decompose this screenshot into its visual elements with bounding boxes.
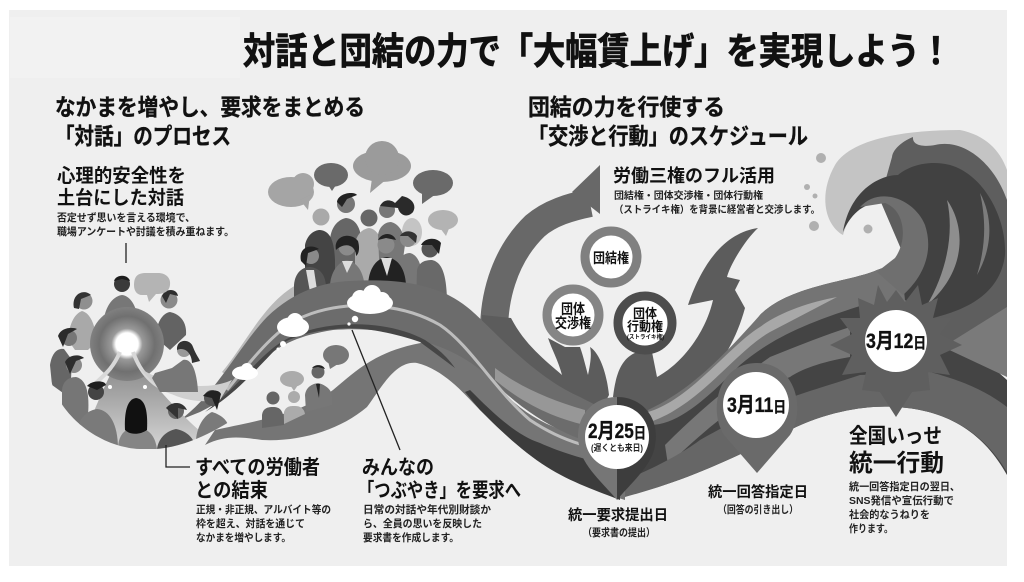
ribbon: arch towards the wave — [620, 260, 1007, 495]
workers on the arch with speech bubbles — [268, 141, 458, 305]
heading: dialogue process: 「対話」のプロセス — [55, 123, 231, 149]
text block: nationwide unified action: 統一回答指定日の翌日、 — [849, 480, 960, 493]
caption: unified demand date — [568, 506, 668, 539]
pin: 3月12日: 3月12日 — [866, 330, 926, 353]
ribbon: light backing band — [222, 268, 490, 385]
glowing dialogue centre — [90, 307, 232, 449]
pin: 2月25日 — [578, 397, 656, 500]
text block: nationwide unified action: 社会的なうねりを — [849, 508, 930, 521]
text block: tsubuyaki to demands — [358, 456, 521, 544]
text block: tsubuyaki to demands: みんなの — [362, 456, 434, 479]
text block: three labour rights: 労働三権のフル活用 — [613, 166, 775, 186]
leader line: all workers — [166, 445, 190, 467]
leader line: psychological safety — [125, 243, 127, 263]
text block: nationwide unified action — [849, 425, 960, 535]
circle: 団体行動権: (ストライキ権) — [627, 333, 664, 341]
text block: nationwide unified action: SNS発信や宣伝行動で — [849, 494, 954, 507]
text block: psychological safety: 心理的安全性を — [57, 165, 186, 187]
circle: 団結権: 団結権 — [593, 250, 629, 266]
wave: light foam — [825, 130, 1007, 240]
wave — [825, 130, 1007, 377]
caption: unified demand date: 統一要求提出日 — [568, 506, 668, 524]
text block: nationwide unified action: 統一行動 — [849, 450, 944, 477]
text block: tsubuyaki to demands: ら、全員の思いを反映した — [363, 517, 482, 530]
wave: crescents — [927, 200, 960, 305]
wave and ribbon illustration — [180, 130, 1007, 500]
wave: inner ring — [860, 196, 928, 295]
text block: nationwide unified action: 全国いっせ — [849, 425, 942, 448]
ribbon: lower band — [205, 342, 625, 500]
text block: three labour rights — [613, 166, 820, 216]
heading: negotiation schedule: 「交渉と行動」のスケジュール — [528, 123, 808, 149]
ribbon: upper arch — [180, 280, 625, 450]
circle: 団体行動権 — [618, 296, 672, 350]
text block: solidarity: との結束 — [195, 479, 268, 502]
leader line: tsubuyaki — [352, 330, 400, 450]
circle: 団体行動権: 行動権 — [627, 319, 663, 334]
three labour rights circles — [547, 231, 672, 350]
crowd — [294, 193, 447, 305]
circle: 団体交渉権: 交渉権 — [555, 315, 591, 331]
text block: solidarity: なかまを増やします。 — [196, 531, 291, 544]
arrow: flame arrow rising right — [613, 228, 758, 412]
text block: tsubuyaki to demands: 「つぶやき」を要求へ — [358, 479, 521, 502]
caption: unified demand date: （要求書の提出） — [583, 526, 655, 539]
heading: negotiation schedule: 団結の力を行使する — [528, 94, 725, 120]
caption: unified answer date — [708, 483, 808, 516]
text block: psychological safety: 土台にした対話 — [57, 187, 184, 209]
heading: negotiation schedule — [528, 94, 808, 149]
text block: tsubuyaki to demands: 日常の対話や年代別財談か — [363, 503, 492, 516]
workers under the arch — [262, 345, 349, 428]
pin: 2月25日: 2月25日 — [588, 420, 646, 443]
circle: 団体交渉権: 団体 — [561, 301, 585, 317]
circle: 団体交渉権 — [547, 289, 599, 341]
text block: solidarity: 枠を超え、対話を通じて — [196, 517, 305, 530]
speech bubble — [134, 273, 170, 302]
text block: solidarity: 正規・非正規、アルバイト等の — [196, 503, 331, 516]
pin: 2月25日: (遅くとも来日) — [591, 442, 643, 453]
arrow: curved arrow rising from the ribbon — [482, 165, 609, 412]
thought clouds — [232, 285, 393, 380]
pin: 3月11日 — [717, 363, 797, 473]
pin: 3月11日: 3月11日 — [727, 394, 786, 417]
seated workers — [50, 328, 228, 449]
pin: 3月12日 — [830, 285, 962, 417]
caption: unified answer date: （回答の引き出し） — [718, 503, 798, 516]
wave: spray drops — [804, 153, 872, 234]
rear workers — [68, 273, 186, 350]
text block: psychological safety: 職場アンケートや討議を積み重ねます。 — [57, 225, 234, 238]
text block: nationwide unified action: 作ります。 — [849, 522, 893, 535]
speech bubbles — [268, 141, 458, 236]
text block: three labour rights: （ストライキ権）を背景に経営者と交渉します。 — [614, 203, 820, 216]
people circle — [50, 273, 232, 449]
text block: psychological safety — [57, 165, 234, 238]
text block: solidarity: すべての労働者 — [195, 456, 320, 479]
circle: 団体行動権: 団体 — [633, 306, 657, 321]
heading: dialogue process — [55, 94, 365, 149]
text block: psychological safety: 否定せず思いを言える環境で、 — [57, 211, 195, 224]
caption: unified answer date: 統一回答指定日 — [708, 483, 808, 501]
heading: dialogue process: なかまを増やし、要求をまとめる — [55, 94, 365, 120]
wave: dark curl — [843, 163, 1005, 318]
wave: crest — [880, 137, 1007, 372]
text block: tsubuyaki to demands: 要求書を作成します。 — [363, 531, 459, 544]
text block: solidarity — [195, 456, 331, 544]
text block: three labour rights: 団結権・団体交渉権・団体行動権 — [614, 189, 763, 202]
